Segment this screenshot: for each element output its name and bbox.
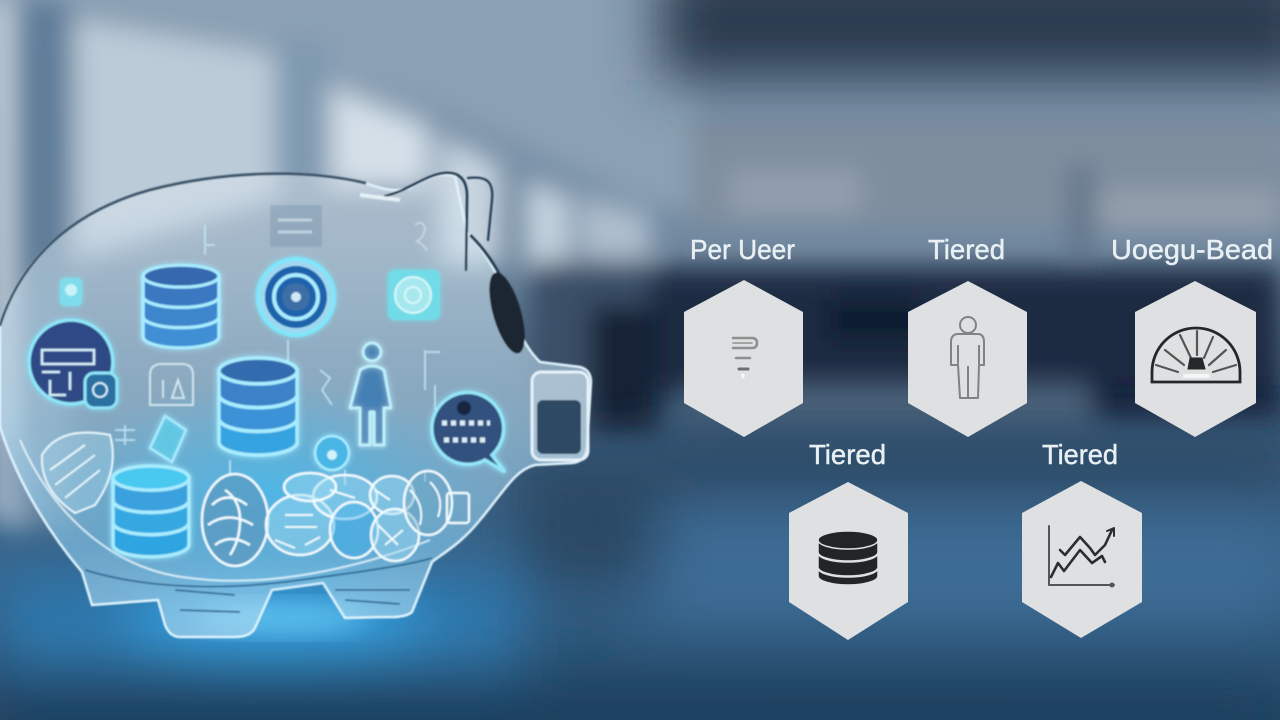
snout window [532, 372, 588, 460]
heading: Tiered: Tiered [809, 439, 886, 470]
database stack 3 [113, 466, 189, 557]
card: Per User [684, 234, 803, 437]
faint top panel icon [270, 205, 427, 251]
card: Tiered chart [1022, 439, 1142, 638]
hexagon [789, 482, 908, 640]
illustration: glass piggy bank [0, 173, 591, 637]
flame coin icon [315, 436, 349, 470]
person icon [350, 343, 391, 445]
database stack 1 [143, 265, 219, 348]
target icon [258, 259, 334, 335]
dashboard circle icon [29, 320, 117, 408]
pig ear clip [482, 269, 532, 357]
card: Tiered database [789, 439, 908, 640]
hexagon [908, 281, 1027, 437]
hexagon [1135, 281, 1256, 437]
icon: gauge [1152, 328, 1240, 382]
heading: Tiered: Tiered [928, 234, 1005, 265]
cyan badge icon [388, 270, 440, 320]
pig dark rim and ear wires [0, 173, 505, 325]
hexagon [1022, 481, 1142, 638]
icon: database [818, 531, 878, 585]
hexagon [684, 280, 803, 437]
pig body [0, 174, 591, 637]
card: Tiered user [908, 234, 1027, 437]
tag icon [150, 416, 186, 462]
heading: Per User: Per Ueer [690, 234, 795, 265]
heading: Usage-Based: Uoegu-Bead [1111, 234, 1273, 265]
inner glow [60, 380, 480, 600]
clipboard outline icon [150, 364, 193, 405]
speech bubble icon [432, 392, 505, 472]
small lock icon [60, 278, 82, 306]
icon: line chart [1049, 526, 1114, 588]
legs details [85, 558, 432, 612]
coins pile [202, 471, 469, 566]
card: Usage-Based [1111, 234, 1273, 437]
database stack 2 [219, 358, 297, 455]
heading: Tiered: Tiered [1042, 439, 1118, 470]
shell / wallet sketch [42, 432, 113, 513]
panel: pricing models [684, 234, 1273, 640]
icon: funnel [733, 338, 757, 377]
circuit lines [115, 225, 440, 485]
icon: person [951, 317, 984, 398]
